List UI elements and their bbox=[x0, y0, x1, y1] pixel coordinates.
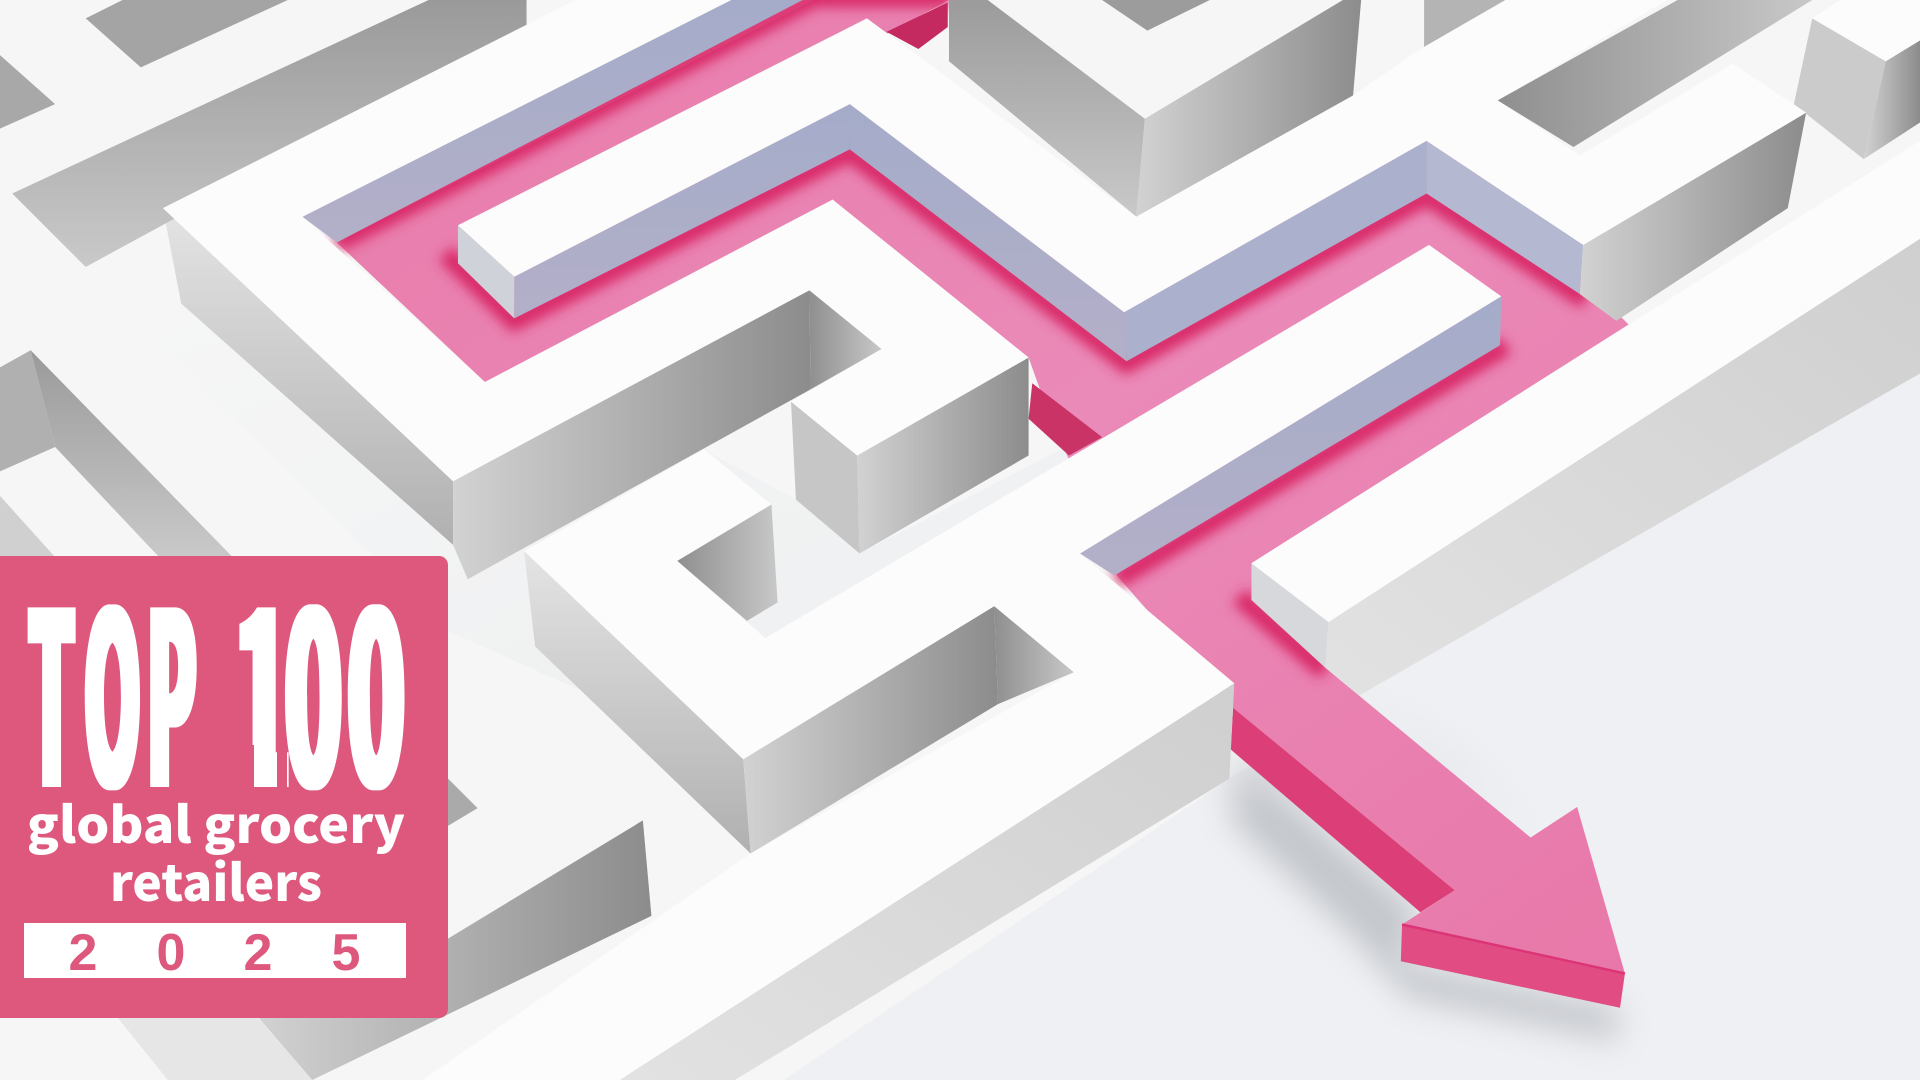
subheadings: global grocery bbox=[27, 786, 405, 858]
heading: TOP 100: 100 bbox=[233, 507, 406, 857]
badge: top 100 global grocery retailers 2025 bbox=[0, 507, 448, 1018]
arrow head thickness bbox=[1401, 924, 1625, 1008]
subheadings: retailers bbox=[110, 844, 322, 916]
subheadings bbox=[27, 786, 405, 916]
badge panel bbox=[0, 556, 448, 1018]
heading: TOP 100: TOP bbox=[29, 509, 197, 857]
route dark corner bbox=[887, 2, 948, 49]
pink route floor and arrow bbox=[337, 0, 1629, 1008]
arrow shaft thickness bbox=[1231, 708, 1455, 912]
heading: TOP 100 bbox=[29, 507, 406, 857]
route wall shadow bbox=[337, 0, 1586, 671]
year: 2025 bbox=[69, 924, 360, 982]
route drop side bbox=[1029, 383, 1102, 456]
year strip bbox=[24, 923, 406, 978]
blue inner walls bbox=[302, 0, 1583, 667]
floor shadows bbox=[1229, 696, 1620, 1041]
arrow head edge bbox=[1402, 924, 1625, 973]
